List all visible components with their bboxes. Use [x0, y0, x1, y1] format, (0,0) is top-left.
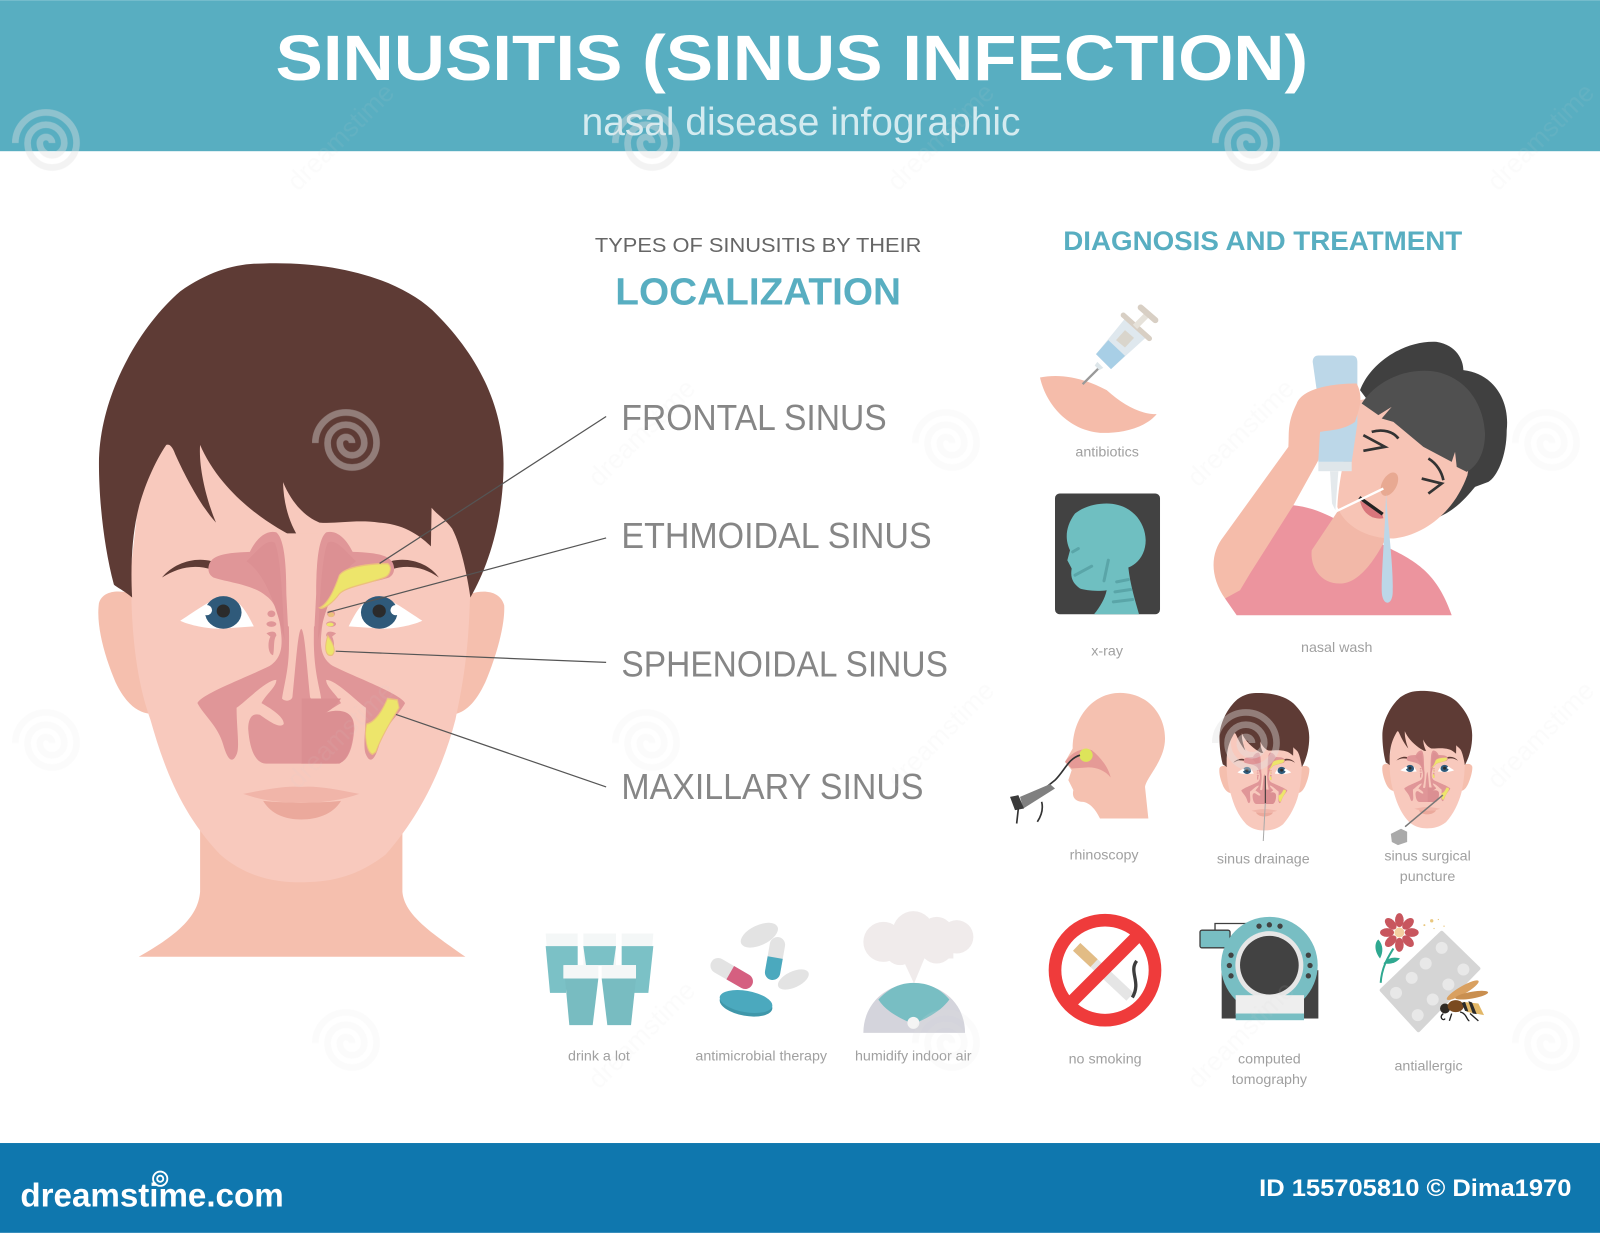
eyes and brows — [1363, 431, 1443, 494]
caption: antiallergic: antiallergic — [1394, 1059, 1463, 1075]
illustration: sinus drainage — [1219, 693, 1309, 841]
caption: sinus surgical puncture — [1384, 848, 1471, 885]
head — [98, 263, 504, 882]
caption: rhinoscopy: rhinoscopy — [1070, 847, 1139, 863]
neck — [139, 822, 465, 957]
illustration: face with sinuses — [98, 263, 504, 957]
icon: x-ray — [1055, 494, 1160, 614]
heading: types of sinusitis: LOCALIZATION — [615, 270, 901, 312]
leader line: frontal sinus — [380, 416, 606, 563]
footer bar — [0, 1143, 1600, 1233]
label: sphenoidal sinus: SPHENOIDAL SINUS — [621, 645, 948, 685]
illustration: nasal wash — [1214, 342, 1507, 615]
caption: sinus surgical puncture: sinus surgical — [1384, 848, 1471, 864]
watermarks: dreamstime — [281, 675, 400, 794]
header banner — [0, 0, 1600, 151]
bottle — [1313, 356, 1357, 462]
caption: nasal wash: nasal wash — [1301, 640, 1372, 656]
hair back — [1360, 342, 1507, 520]
leader line: ethmoidal sinus — [328, 538, 606, 612]
caption: antibiotics: antibiotics — [1075, 444, 1139, 460]
caption: x-ray: x-ray — [1091, 643, 1124, 659]
heading: diagnosis and treatment: DIAGNOSIS AND TREATMENT — [1063, 226, 1462, 256]
watermarks: dreamstime — [1181, 373, 1300, 492]
label: frontal sinus: FRONTAL SINUS — [621, 398, 887, 438]
watermarks: dreamstime — [1181, 975, 1300, 1094]
heading: types of sinusitis — [595, 235, 921, 312]
caption: no smoking: no smoking — [1069, 1051, 1142, 1067]
label: ethmoidal sinus: ETHMOIDAL SINUS — [621, 516, 932, 556]
shirt — [1225, 505, 1452, 615]
subtitle: nasal disease infographic — [582, 101, 1020, 144]
logo spiral — [153, 1172, 167, 1186]
mouth — [1360, 501, 1383, 519]
logo text: dreamstime.com — [20, 1177, 284, 1214]
nose — [1377, 470, 1402, 499]
arm — [1214, 384, 1360, 599]
neck — [1312, 510, 1387, 584]
icon: glasses of water — [546, 934, 653, 1025]
title: SINUSITIS (SINUS INFECTION) — [276, 22, 1308, 94]
icon: humidifier — [863, 911, 973, 1033]
caption: antimicrobial therapy: antimicrobial therapy — [695, 1048, 828, 1064]
watermarks: dreamstime — [881, 77, 1000, 196]
face — [1337, 390, 1477, 539]
leader line: maxillary sinus — [396, 714, 606, 787]
caption: sinus surgical puncture: puncture — [1400, 869, 1455, 885]
caption: drink a lot: drink a lot — [568, 1048, 630, 1064]
caption: computed tomography: tomography — [1232, 1072, 1308, 1088]
label: maxillary sinus: MAXILLARY SINUS — [621, 767, 923, 807]
watermarks: dreamstime — [582, 975, 701, 1094]
fringe — [1362, 371, 1485, 472]
illustration: sinus surgical puncture — [1382, 691, 1472, 845]
caption: humidify indoor air: humidify indoor air — [855, 1048, 972, 1064]
icon: antiallergic blister, flower and wasp — [1375, 913, 1489, 1030]
watermarks: dreamstime — [881, 675, 1000, 794]
image id and credit: ID 155705810 © Dima1970 — [1259, 1175, 1571, 1202]
caption: sinus drainage: sinus drainage — [1217, 851, 1310, 867]
caption: computed tomography: computed — [1238, 1051, 1301, 1067]
icon: computed tomography scanner — [1200, 917, 1318, 1020]
watermarks: dreamstime — [1481, 77, 1600, 196]
watermarks: dreamstime — [1481, 675, 1600, 794]
icon: no smoking — [1055, 920, 1155, 1020]
tube — [1335, 489, 1383, 512]
water stream — [1382, 494, 1393, 603]
watermarks: dreamstime — [582, 373, 701, 492]
leader line: sphenoidal sinus — [336, 651, 606, 662]
icon: antibiotics syringe and arm — [1040, 308, 1157, 433]
icon: pills — [708, 918, 812, 1020]
caption: computed tomography — [1232, 1051, 1308, 1088]
watermarks: dreamstime — [281, 77, 400, 196]
heading: types of sinusitis: TYPES OF SINUSITIS BY THEIR — [595, 235, 921, 257]
illustration: rhinoscopy — [1010, 693, 1165, 824]
